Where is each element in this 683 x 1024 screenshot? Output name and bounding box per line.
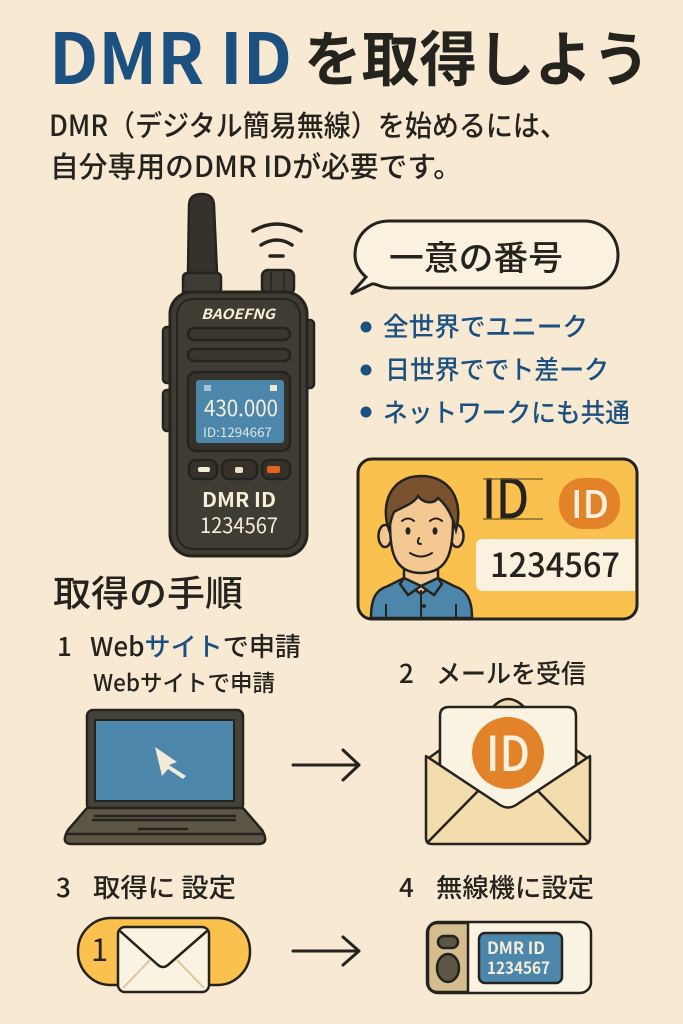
radio body xyxy=(170,292,307,556)
step 3 label: 取得に 設定 xyxy=(93,868,236,905)
icon: radio transceiver xyxy=(163,194,314,556)
intro text xyxy=(49,103,567,186)
icon: radio panel with ID: 1234567 xyxy=(487,955,550,979)
icon: laptop xyxy=(65,710,265,844)
radio ID label: 1234567 xyxy=(200,510,278,540)
icon: radio panel with ID xyxy=(427,922,591,993)
step 4 label: 無線機に設定 xyxy=(436,868,594,905)
display xyxy=(188,372,290,451)
step 2 label: メールを受信 xyxy=(436,654,586,691)
step 2 label: 2 xyxy=(399,654,414,691)
ID heading: ID xyxy=(482,455,529,534)
speaker slots xyxy=(188,328,290,361)
person portrait xyxy=(371,476,472,618)
intro text: 自分専用のDMR IDが必要です。 xyxy=(50,144,462,186)
icon: pill with mail xyxy=(78,918,250,992)
control buttons xyxy=(189,460,290,479)
bullet list: ネットワークにも共通 xyxy=(383,393,630,430)
title: DMR ID xyxy=(49,4,292,105)
side buttons xyxy=(163,320,314,431)
step 1 label: 1 xyxy=(57,627,72,664)
brand label: BAOEFNG xyxy=(201,304,277,324)
step 3 label: 3 xyxy=(56,868,71,905)
intro text: DMR（デジタル簡易無線）を始めるには、 xyxy=(49,103,567,145)
speech bubble: 一意の番号 xyxy=(389,231,563,280)
radio ID label xyxy=(200,484,278,540)
bullet list: 全世界でユニーク xyxy=(383,307,588,344)
orange ID badge: ID xyxy=(571,474,609,529)
cursor xyxy=(155,747,186,779)
step 1 sub label: Webサイトで申請 xyxy=(93,664,275,698)
ID number panel: 1234567 xyxy=(490,539,620,587)
procedure heading: 取得の手順 xyxy=(53,565,243,617)
title xyxy=(49,4,650,105)
speech bubble xyxy=(351,221,618,294)
radio ID label: DMR ID xyxy=(202,484,276,513)
arrow: step 3 to 4 xyxy=(293,937,359,965)
signal waves xyxy=(253,224,301,256)
ID card xyxy=(358,455,637,619)
tuning knob xyxy=(262,270,294,294)
bullet list xyxy=(360,307,630,430)
step 1 label: Webサイトで申請 xyxy=(90,627,301,664)
icon: envelope with ID xyxy=(426,699,590,844)
icon: pill with mail: 1 xyxy=(91,925,108,970)
orange ID badge xyxy=(559,474,620,529)
arrow: step 1 to 2 xyxy=(293,750,359,780)
step 4 label: 4 xyxy=(399,868,414,905)
antenna collar xyxy=(183,273,221,292)
title: を取得しよう xyxy=(304,12,650,99)
icon: envelope with ID: ID xyxy=(486,715,530,785)
display: ID:1294667 xyxy=(203,422,272,441)
icon: radio panel with ID: DMR ID xyxy=(487,935,545,959)
display: 430.000 xyxy=(204,391,278,423)
bullet list: 日世界ででト差ーク xyxy=(385,350,609,387)
radio antenna xyxy=(188,194,217,273)
